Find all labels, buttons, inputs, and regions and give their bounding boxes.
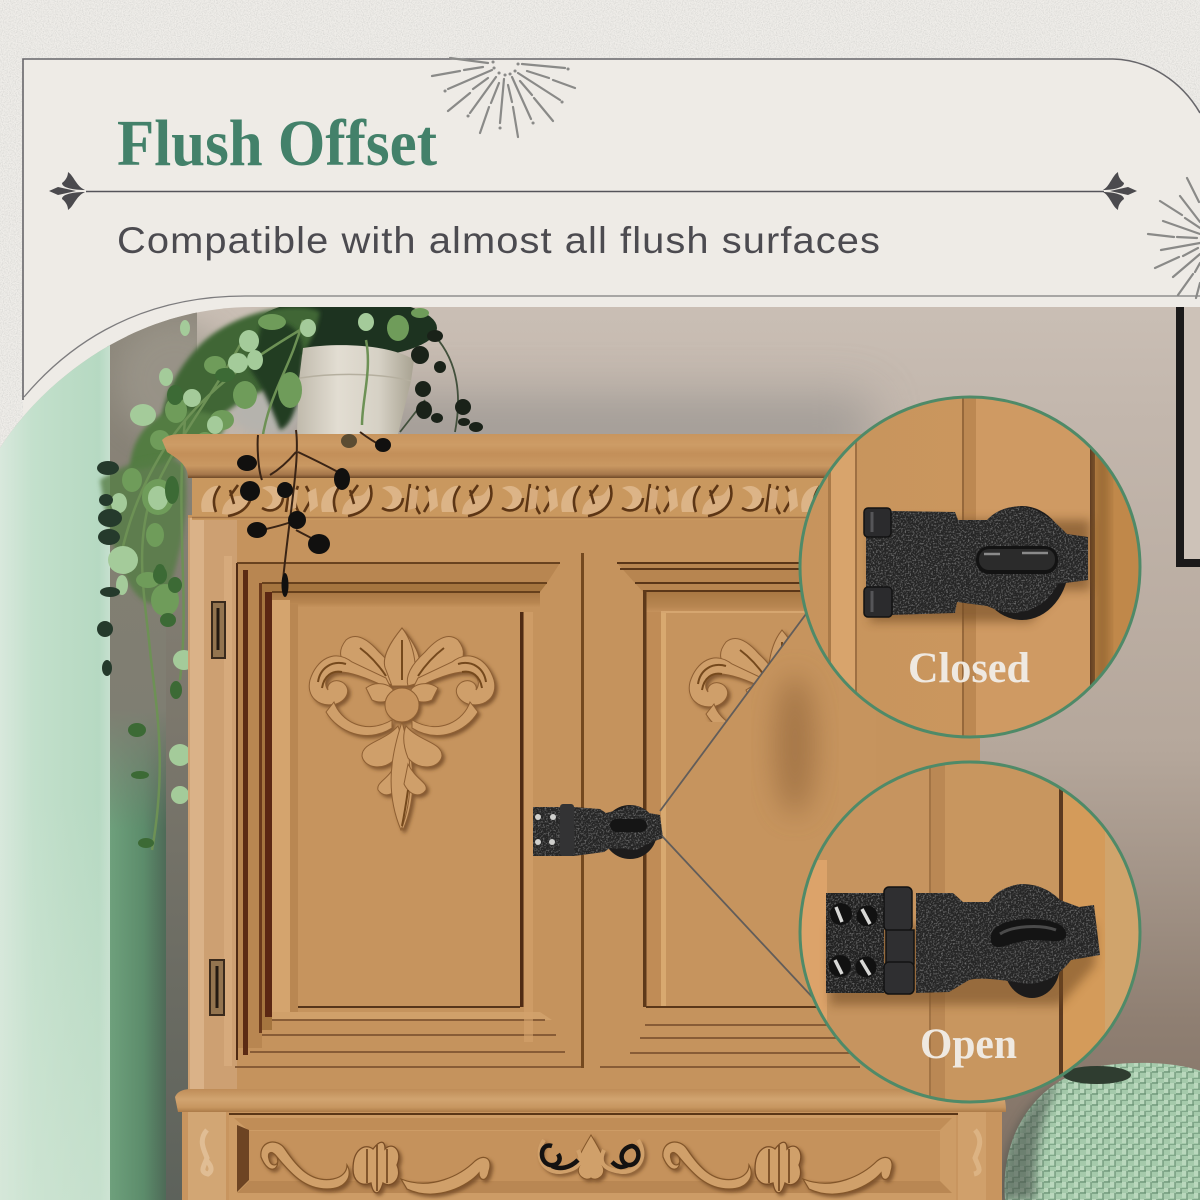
lower cabinet with drawer [182,1112,1002,1200]
product photo [0,298,1200,1200]
closed hasp round disc [994,506,1066,620]
soft shadow on right door [775,675,815,815]
cabinet body [188,515,980,1095]
sunburst decoration: right [1148,178,1200,298]
divider with ornaments [49,172,1137,210]
open hasp screws [829,903,878,978]
closed hasp plate [866,506,1088,615]
subtitle: Compatible with almost all flush surfaces [117,220,881,261]
open hasp plate [916,884,1100,993]
picture frame [1176,307,1200,567]
callout lines [660,614,815,1000]
hasp on cabinet door [533,804,663,859]
green knitted basket [1000,1063,1200,1200]
armoire cabinet [162,434,1006,1200]
frieze band [192,478,824,520]
header panel [23,59,1200,440]
open hasp disc [1008,972,1060,998]
zoom circle: closed [800,397,1145,737]
closed hasp staple [976,546,1058,574]
left door hinges [210,602,225,1015]
cabinet left stile [188,518,237,1093]
right door moulding [600,563,876,1067]
open hasp mounting plate [826,893,884,993]
crown moulding [162,434,862,478]
plant foliage behind pot [100,298,437,604]
left door moulding [235,553,584,1068]
dark trailing stems and berries [237,430,391,597]
closed hasp shadow [870,520,1090,622]
closed detail wood background [800,397,1145,737]
lower cornice [175,1089,1006,1112]
closed label: Closed [908,645,1030,692]
open hasp staple [991,919,1066,947]
sunburst decoration: top [432,58,575,137]
drawer handle loops [542,1145,638,1168]
plant vines and leaves [97,308,483,850]
drawer carving scrolls [261,1135,892,1194]
white plant pot [297,345,414,434]
right door ornament [688,630,790,722]
green curtain [0,300,166,1200]
textured page background [0,0,1200,460]
wall [0,300,1200,1200]
title: Flush Offset [117,107,437,180]
open detail wood background [800,762,1145,1102]
closed hasp knuckles [864,508,892,617]
zoom circle: open [800,762,1145,1102]
open hasp shadow [830,925,1095,1005]
open label: Open [920,1021,1017,1068]
left door ornament [309,628,495,830]
open hasp hinge [884,887,914,994]
